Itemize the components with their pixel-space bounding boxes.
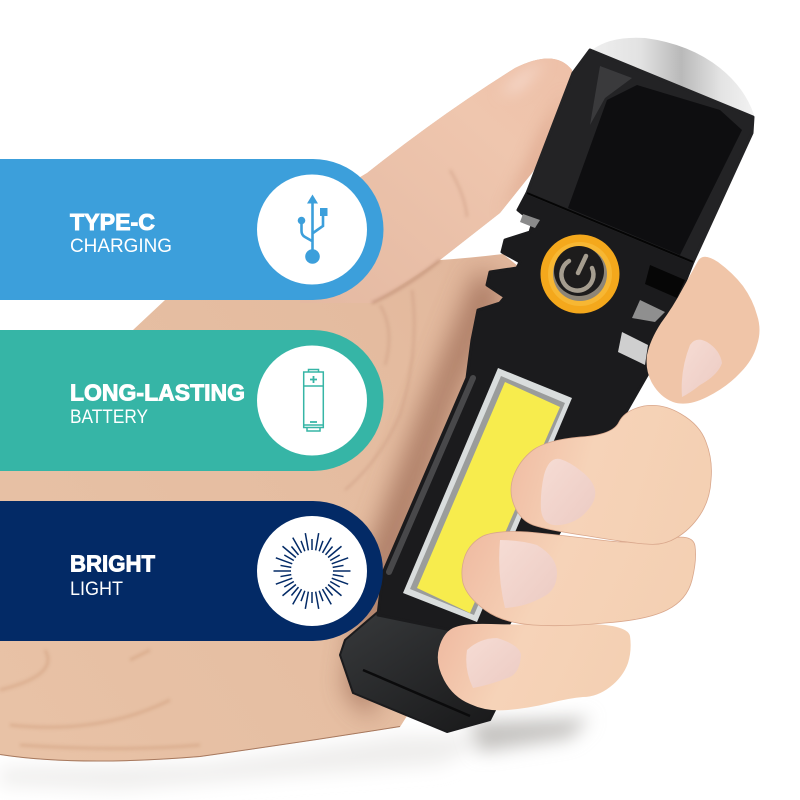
head bbox=[527, 50, 753, 262]
label: charging: CHARGING bbox=[70, 236, 172, 257]
icon: sunburst bbox=[257, 516, 367, 626]
heading: long-lasting: LONG-LASTING bbox=[70, 380, 245, 406]
index finger bbox=[647, 257, 760, 404]
tail cap bbox=[340, 610, 530, 732]
hand: palm and thumb bbox=[0, 58, 572, 762]
panel: type-c charging bbox=[0, 159, 384, 300]
icon: usb bbox=[257, 174, 367, 284]
flashlight bbox=[340, 38, 754, 732]
seam bbox=[527, 193, 693, 262]
ring finger bbox=[462, 532, 696, 626]
grip slots bbox=[645, 265, 685, 298]
power button bbox=[540, 234, 620, 314]
little finger bbox=[438, 624, 631, 710]
ground shadow bbox=[0, 718, 590, 790]
panel: long-lasting battery bbox=[0, 330, 384, 471]
palm shading beside flashlight bbox=[345, 268, 505, 720]
side strip bbox=[389, 378, 473, 572]
label: battery: BATTERY bbox=[70, 407, 148, 428]
icon: battery bbox=[257, 346, 367, 456]
label: light: LIGHT bbox=[70, 579, 123, 600]
heading: type-c: TYPE-C bbox=[70, 209, 155, 235]
panel: bright light bbox=[0, 501, 383, 641]
lens bezel bbox=[592, 38, 754, 115]
lower body bbox=[378, 193, 693, 640]
heading: bright: BRIGHT bbox=[70, 550, 156, 576]
middle finger bbox=[511, 405, 711, 544]
COB light panel bbox=[403, 368, 572, 622]
